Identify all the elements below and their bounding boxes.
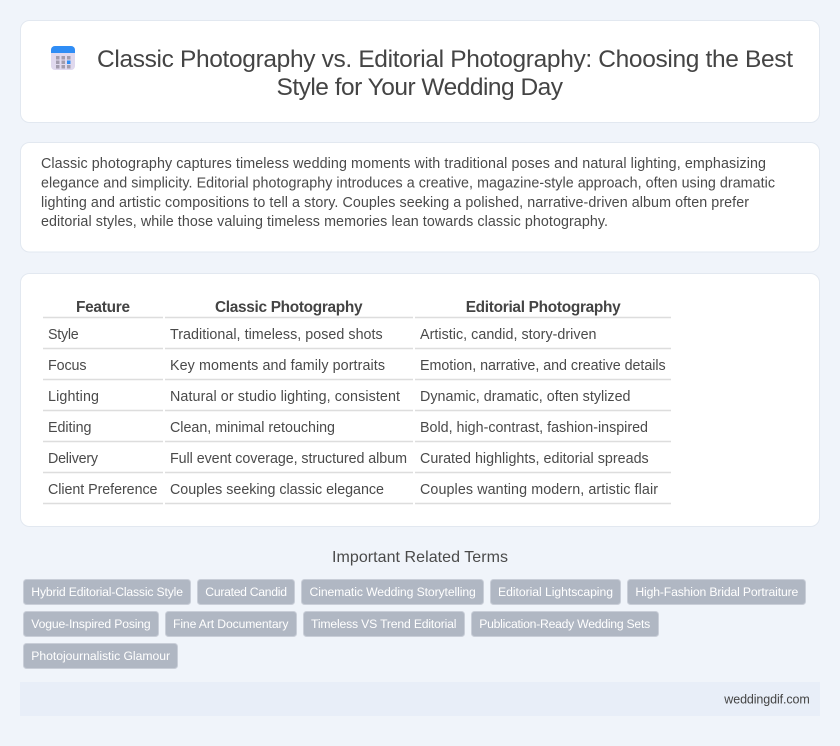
row: focus: Focus <box>48 358 86 374</box>
related term tags: Curated Candid <box>205 585 287 599</box>
icon: calendar grid <box>51 46 75 70</box>
related term tags: Cinematic Wedding Storytelling <box>310 585 476 599</box>
related term tags: High-Fashion Bridal Portraiture <box>635 585 799 599</box>
row: lighting <box>48 389 631 405</box>
related term tags: Photojournalistic Glamour <box>31 649 170 663</box>
panel: intro text: lighting and artistic compositions to tell a story. Couples seeking a polished, narrative-driven album often prefer <box>41 195 749 211</box>
related term tags <box>24 580 806 668</box>
row: lighting: Dynamic, dramatic, often stylized <box>420 389 631 405</box>
row: editing: Bold, high-contrast, fashion-inspired <box>420 420 648 436</box>
panel: header <box>20 20 820 122</box>
related term tags: Publication-Ready Wedding Sets <box>479 617 650 631</box>
footer: weddingdif.com <box>723 692 810 706</box>
row: style: Traditional, timeless, posed shots <box>170 327 383 343</box>
row: delivery: Delivery <box>48 451 99 467</box>
row: focus <box>48 358 666 374</box>
row: editing: Clean, minimal retouching <box>170 420 335 436</box>
row: delivery: Curated highlights, editorial spreads <box>420 451 649 467</box>
row: style <box>48 327 597 343</box>
row: client preference: Couples wanting modern, artistic flair <box>420 482 658 498</box>
table header: Editorial Photography <box>466 299 621 316</box>
title: Style for Your Wedding Day <box>276 74 564 101</box>
panel: comparison table <box>20 274 820 526</box>
row: delivery: Full event coverage, structured album <box>170 451 407 467</box>
row: focus: Key moments and family portraits <box>170 358 385 374</box>
heading: important related terms: Important Related Terms <box>332 549 508 566</box>
title: Classic Photography vs. Editorial Photography: Choosing the Best <box>97 46 793 73</box>
row: lighting: Lighting <box>48 389 99 405</box>
row: lighting: Natural or studio lighting, consistent <box>170 389 400 405</box>
related term tags: Fine Art Documentary <box>173 617 289 631</box>
related term tags: Vogue-Inspired Posing <box>31 617 151 631</box>
footer <box>20 682 820 716</box>
related term tags: Hybrid Editorial-Classic Style <box>31 585 183 599</box>
row: client preference: Couples seeking classic elegance <box>170 482 384 498</box>
panel: intro text <box>20 142 820 252</box>
related term tags: Editorial Lightscaping <box>498 585 613 599</box>
row: style: Style <box>48 327 79 343</box>
panel: intro text: Classic photography captures timeless wedding moments with traditional poses and natural lighting, emphasizing <box>41 156 766 172</box>
table header: Feature <box>76 299 130 316</box>
panel: intro text: editorial styles, while those valuing timeless memories lean towards classic photography. <box>41 214 608 230</box>
table header <box>76 299 621 316</box>
row: editing <box>48 420 648 436</box>
row: editing: Editing <box>48 420 92 436</box>
row: focus: Emotion, narrative, and creative details <box>420 358 666 374</box>
title <box>97 46 793 101</box>
related term tags: Timeless VS Trend Editorial <box>311 617 456 631</box>
row: style: Artistic, candid, story-driven <box>420 327 597 343</box>
row: delivery <box>48 451 649 467</box>
panel: intro text: elegance and simplicity. Editorial photography introduces a creative, magazine-style approach, often using dramatic <box>41 176 775 192</box>
row: client preference: Client Preference <box>48 482 158 498</box>
row: client preference <box>48 482 658 498</box>
table header: Classic Photography <box>215 299 363 316</box>
